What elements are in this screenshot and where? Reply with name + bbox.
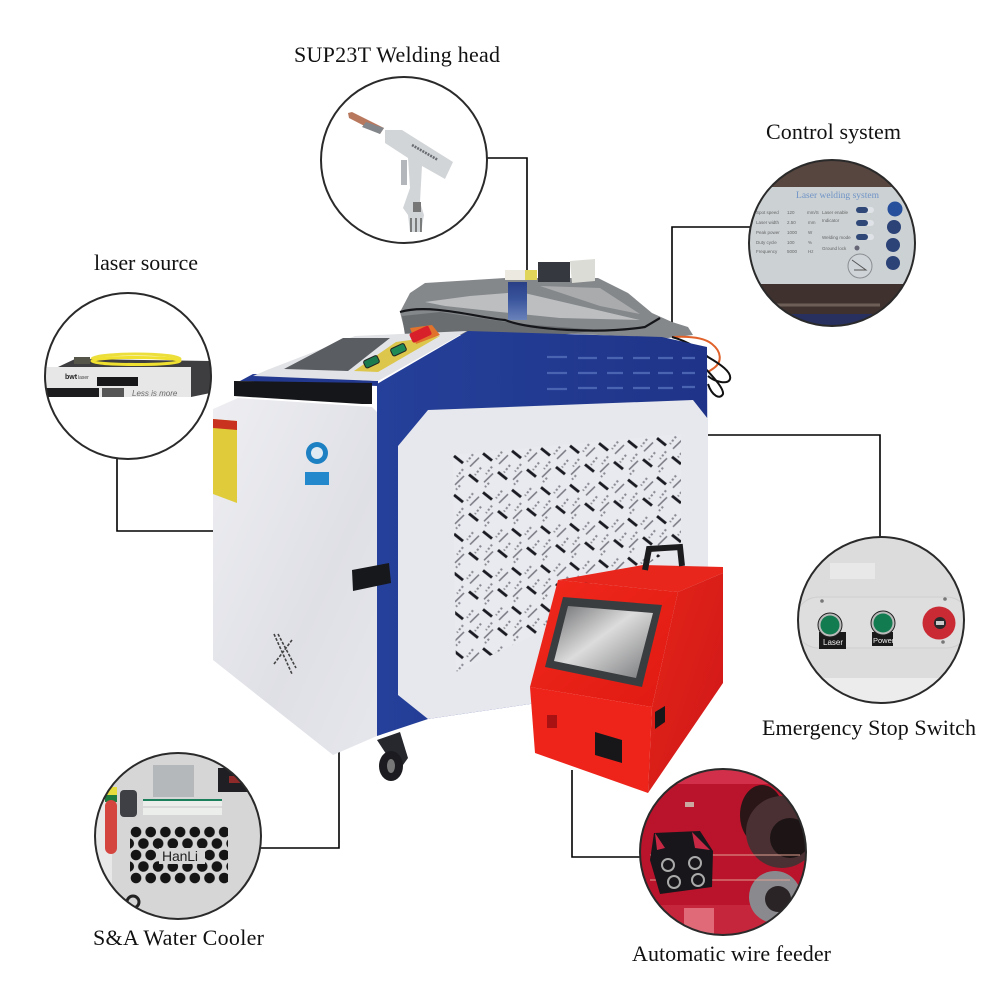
white front panel [398,400,708,719]
screen parameter rows: 100 [787,240,795,245]
blue logo badge [305,442,329,485]
laser button: Laser [823,638,843,647]
vent slits [547,357,695,389]
circle: water cooler [90,750,261,920]
screen parameter rows: 2.50 [787,220,796,225]
display [218,768,248,792]
circle: laser source: laser [78,375,89,381]
screen parameter rows: mm/S [807,210,819,215]
white side panel [213,398,377,755]
red wire feeder unit [530,547,723,793]
power button: Power [873,636,895,645]
screen parameter rows: Hz [808,249,814,254]
yellow fiber coil [90,352,182,360]
level gauge [105,787,117,854]
circle: wire feeder [640,769,818,935]
side cables [672,337,730,397]
circle: emergency stop switch [795,537,970,708]
brand text: HanLi [162,848,198,864]
screen parameter rows: Welding mode [822,235,851,240]
wrapped cable bundle [400,259,693,338]
water cap [120,790,137,817]
spec table [143,799,222,815]
label: laser source: laser source [94,250,198,275]
spec plate [153,765,194,797]
rack front [40,367,191,397]
right side [648,573,723,793]
handle bar [234,381,372,404]
touch screen [545,597,662,687]
screen parameter rows: Ground lock [822,246,847,251]
screen parameter rows: Laser width [756,220,780,225]
carry handle [645,547,682,570]
circle: laser source [40,293,215,459]
screen parameter rows: 120 [787,210,795,215]
label: emergency stop switch: Emergency Stop Switch [762,715,976,740]
small vent mark [274,634,296,674]
screen parameter rows: Duty cycle [756,240,777,245]
label: wire feeder: Automatic wire feeder [632,941,832,966]
screen parameter rows: % [808,240,812,245]
screen parameter rows: Peak power [756,230,780,235]
top control panel [240,325,467,386]
circle: welding head [321,77,487,243]
feeder rollers [650,831,713,894]
screen parameter rows: Frequency [756,249,778,254]
laser button [818,613,846,649]
toggle switches [848,207,874,278]
circle: control system [748,159,916,327]
circle: laser source: Less is more [132,389,178,398]
label: welding head: SUP23T Welding head [294,42,500,67]
power button [871,611,895,646]
label: water cooler: S&A Water Cooler [93,925,265,950]
warning sticker [213,419,237,503]
screen title: Laser welding system [796,191,880,201]
circle: laser source: bwt [65,374,78,381]
label: control system: Control system [766,119,901,144]
screen parameter rows: 5000 [787,249,798,254]
side latch [352,563,391,591]
screen parameter rows: Laser enable [822,210,849,215]
screen parameter rows [756,210,851,254]
screen parameter rows: mm [808,220,816,225]
hexagon vents [130,826,228,884]
screen parameter rows: Spot speed [756,210,779,215]
top face [558,565,723,592]
blue body [377,331,708,736]
screen parameter rows: Indicator [822,218,840,223]
lower front [530,687,652,793]
sloped front [530,580,678,707]
main welding machine [213,259,730,781]
connector lines [117,158,880,857]
wire spools [740,785,805,922]
icon: welding gun [348,112,453,232]
screen parameter rows: 1000 [787,230,798,235]
perforated grille [453,434,681,672]
red stop button [922,606,956,640]
screen parameter rows: W [808,230,813,235]
caster wheel [377,732,408,781]
nav buttons [886,202,902,270]
switch, socket and slot [547,706,665,763]
